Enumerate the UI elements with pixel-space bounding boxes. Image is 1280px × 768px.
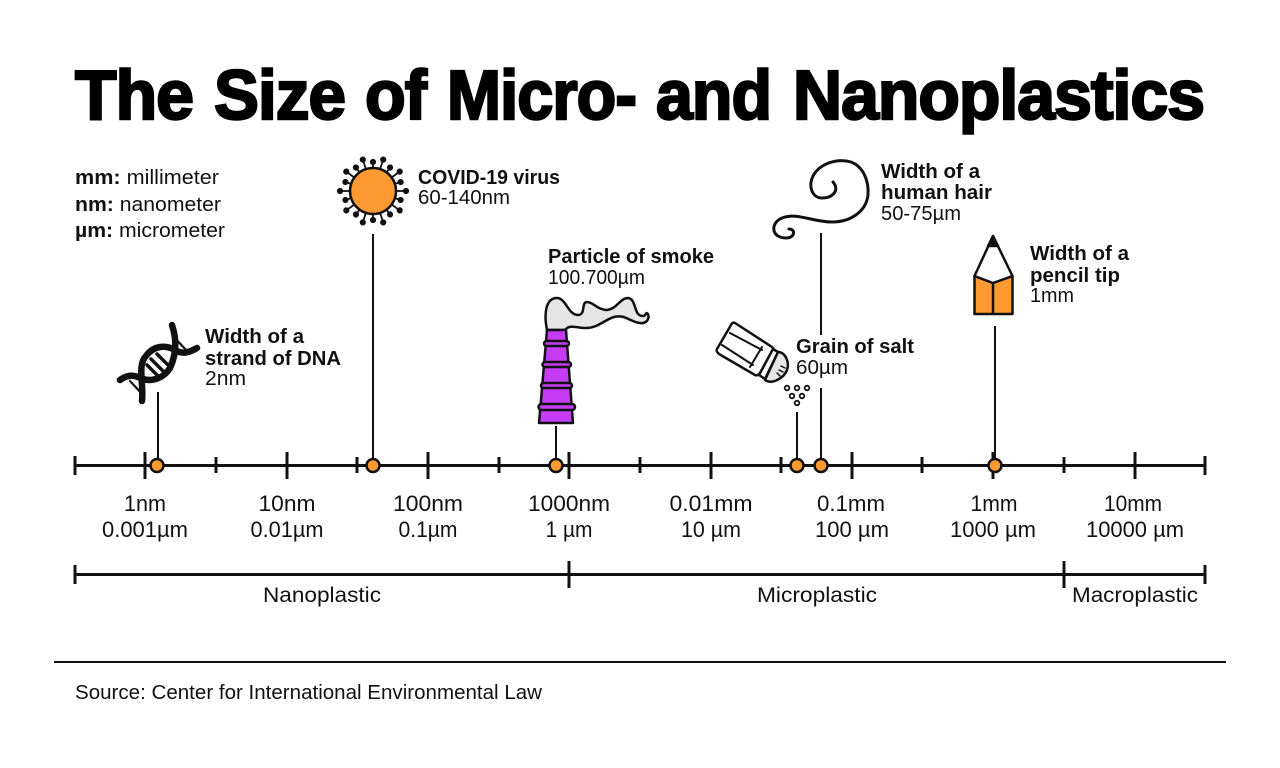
label: DNA: strand of DNA [205, 348, 341, 370]
axis labels: 100 µm [815, 517, 889, 542]
axis labels: 0.001µm [102, 517, 188, 542]
smoke plume [546, 298, 649, 330]
icon: DNA strand [120, 325, 197, 401]
virus pointer line [372, 234, 374, 460]
hair pointer lines [820, 233, 822, 460]
legend: unit abbreviations: nm: nanometer [75, 194, 221, 216]
label: smoke [548, 246, 714, 289]
axis labels: 1000 µm [950, 517, 1036, 542]
axis labels: 0.1µm [398, 517, 458, 542]
DNA pointer line [157, 392, 159, 460]
icon: salt grains [785, 386, 809, 405]
axis labels [102, 491, 1184, 542]
label: COVID-19 virus: COVID-19 virus [418, 167, 560, 189]
icon: smokestack [538, 298, 649, 423]
category labels: Microplastic [757, 584, 877, 607]
axis labels: 1nm [124, 491, 166, 516]
axis labels: 0.01mm [670, 491, 752, 516]
axis labels: 10nm [258, 491, 316, 516]
label: salt: Grain of salt [796, 336, 914, 358]
axis labels: 0.1mm [817, 491, 885, 516]
label: human hair [881, 161, 992, 225]
pencil pointer line [994, 326, 996, 460]
icon: pencil [974, 236, 1012, 314]
smokestack pointer line [555, 426, 557, 460]
category range bar [75, 561, 1205, 588]
label: smoke: Particle of smoke [548, 246, 714, 268]
title: of [365, 56, 428, 134]
axis labels: 10mm [1104, 491, 1162, 516]
label: DNA: Width of a [205, 326, 305, 348]
label: pencil tip: pencil tip [1030, 265, 1120, 287]
legend: unit abbreviations: mm: millimeter [75, 167, 219, 189]
title: The [75, 56, 193, 134]
title: and [656, 56, 771, 134]
icon: COVID-19 virus [338, 157, 408, 225]
chimney body [539, 330, 573, 423]
legend: unit abbreviations: µm: micrometer [75, 220, 225, 242]
axis labels: 10000 µm [1086, 517, 1184, 542]
label: salt [796, 336, 914, 379]
source note: Source: Center for International Environmental Law [75, 682, 543, 704]
axis labels: 1 µm [546, 517, 592, 542]
label: smoke: 100.700µm [548, 267, 645, 289]
label: COVID-19 virus [418, 167, 560, 209]
axis labels: 100nm [393, 491, 463, 516]
title [75, 56, 1204, 134]
icon: salt shaker [717, 323, 788, 382]
axis markers [150, 459, 1002, 472]
title: Nanoplastics [793, 56, 1204, 134]
label: pencil tip [1030, 243, 1130, 307]
title: Micro- [447, 56, 636, 134]
category labels: Macroplastic [1072, 584, 1198, 607]
label: DNA: 2nm [205, 368, 246, 390]
axis labels: 10 µm [681, 517, 741, 542]
label: human hair: Width of a [881, 161, 981, 183]
salt pointer line [796, 412, 798, 460]
category labels: Nanoplastic [263, 584, 381, 607]
size scale axis [75, 452, 1205, 479]
legend: unit abbreviations [75, 167, 225, 242]
icon: human hair [774, 161, 868, 238]
title: Size [214, 56, 345, 134]
category labels [263, 584, 1198, 607]
label: COVID-19 virus: 60-140nm [418, 187, 510, 209]
label: DNA [205, 326, 341, 390]
axis labels: 1000nm [528, 491, 610, 516]
label: salt: 60µm [796, 357, 848, 379]
axis labels: 1mm [970, 491, 1018, 516]
label: pencil tip: Width of a [1030, 243, 1130, 265]
label: pencil tip: 1mm [1030, 285, 1074, 307]
axis labels: 0.01µm [250, 517, 324, 542]
label: human hair: 50-75µm [881, 203, 961, 225]
label: human hair: human hair [881, 182, 992, 204]
